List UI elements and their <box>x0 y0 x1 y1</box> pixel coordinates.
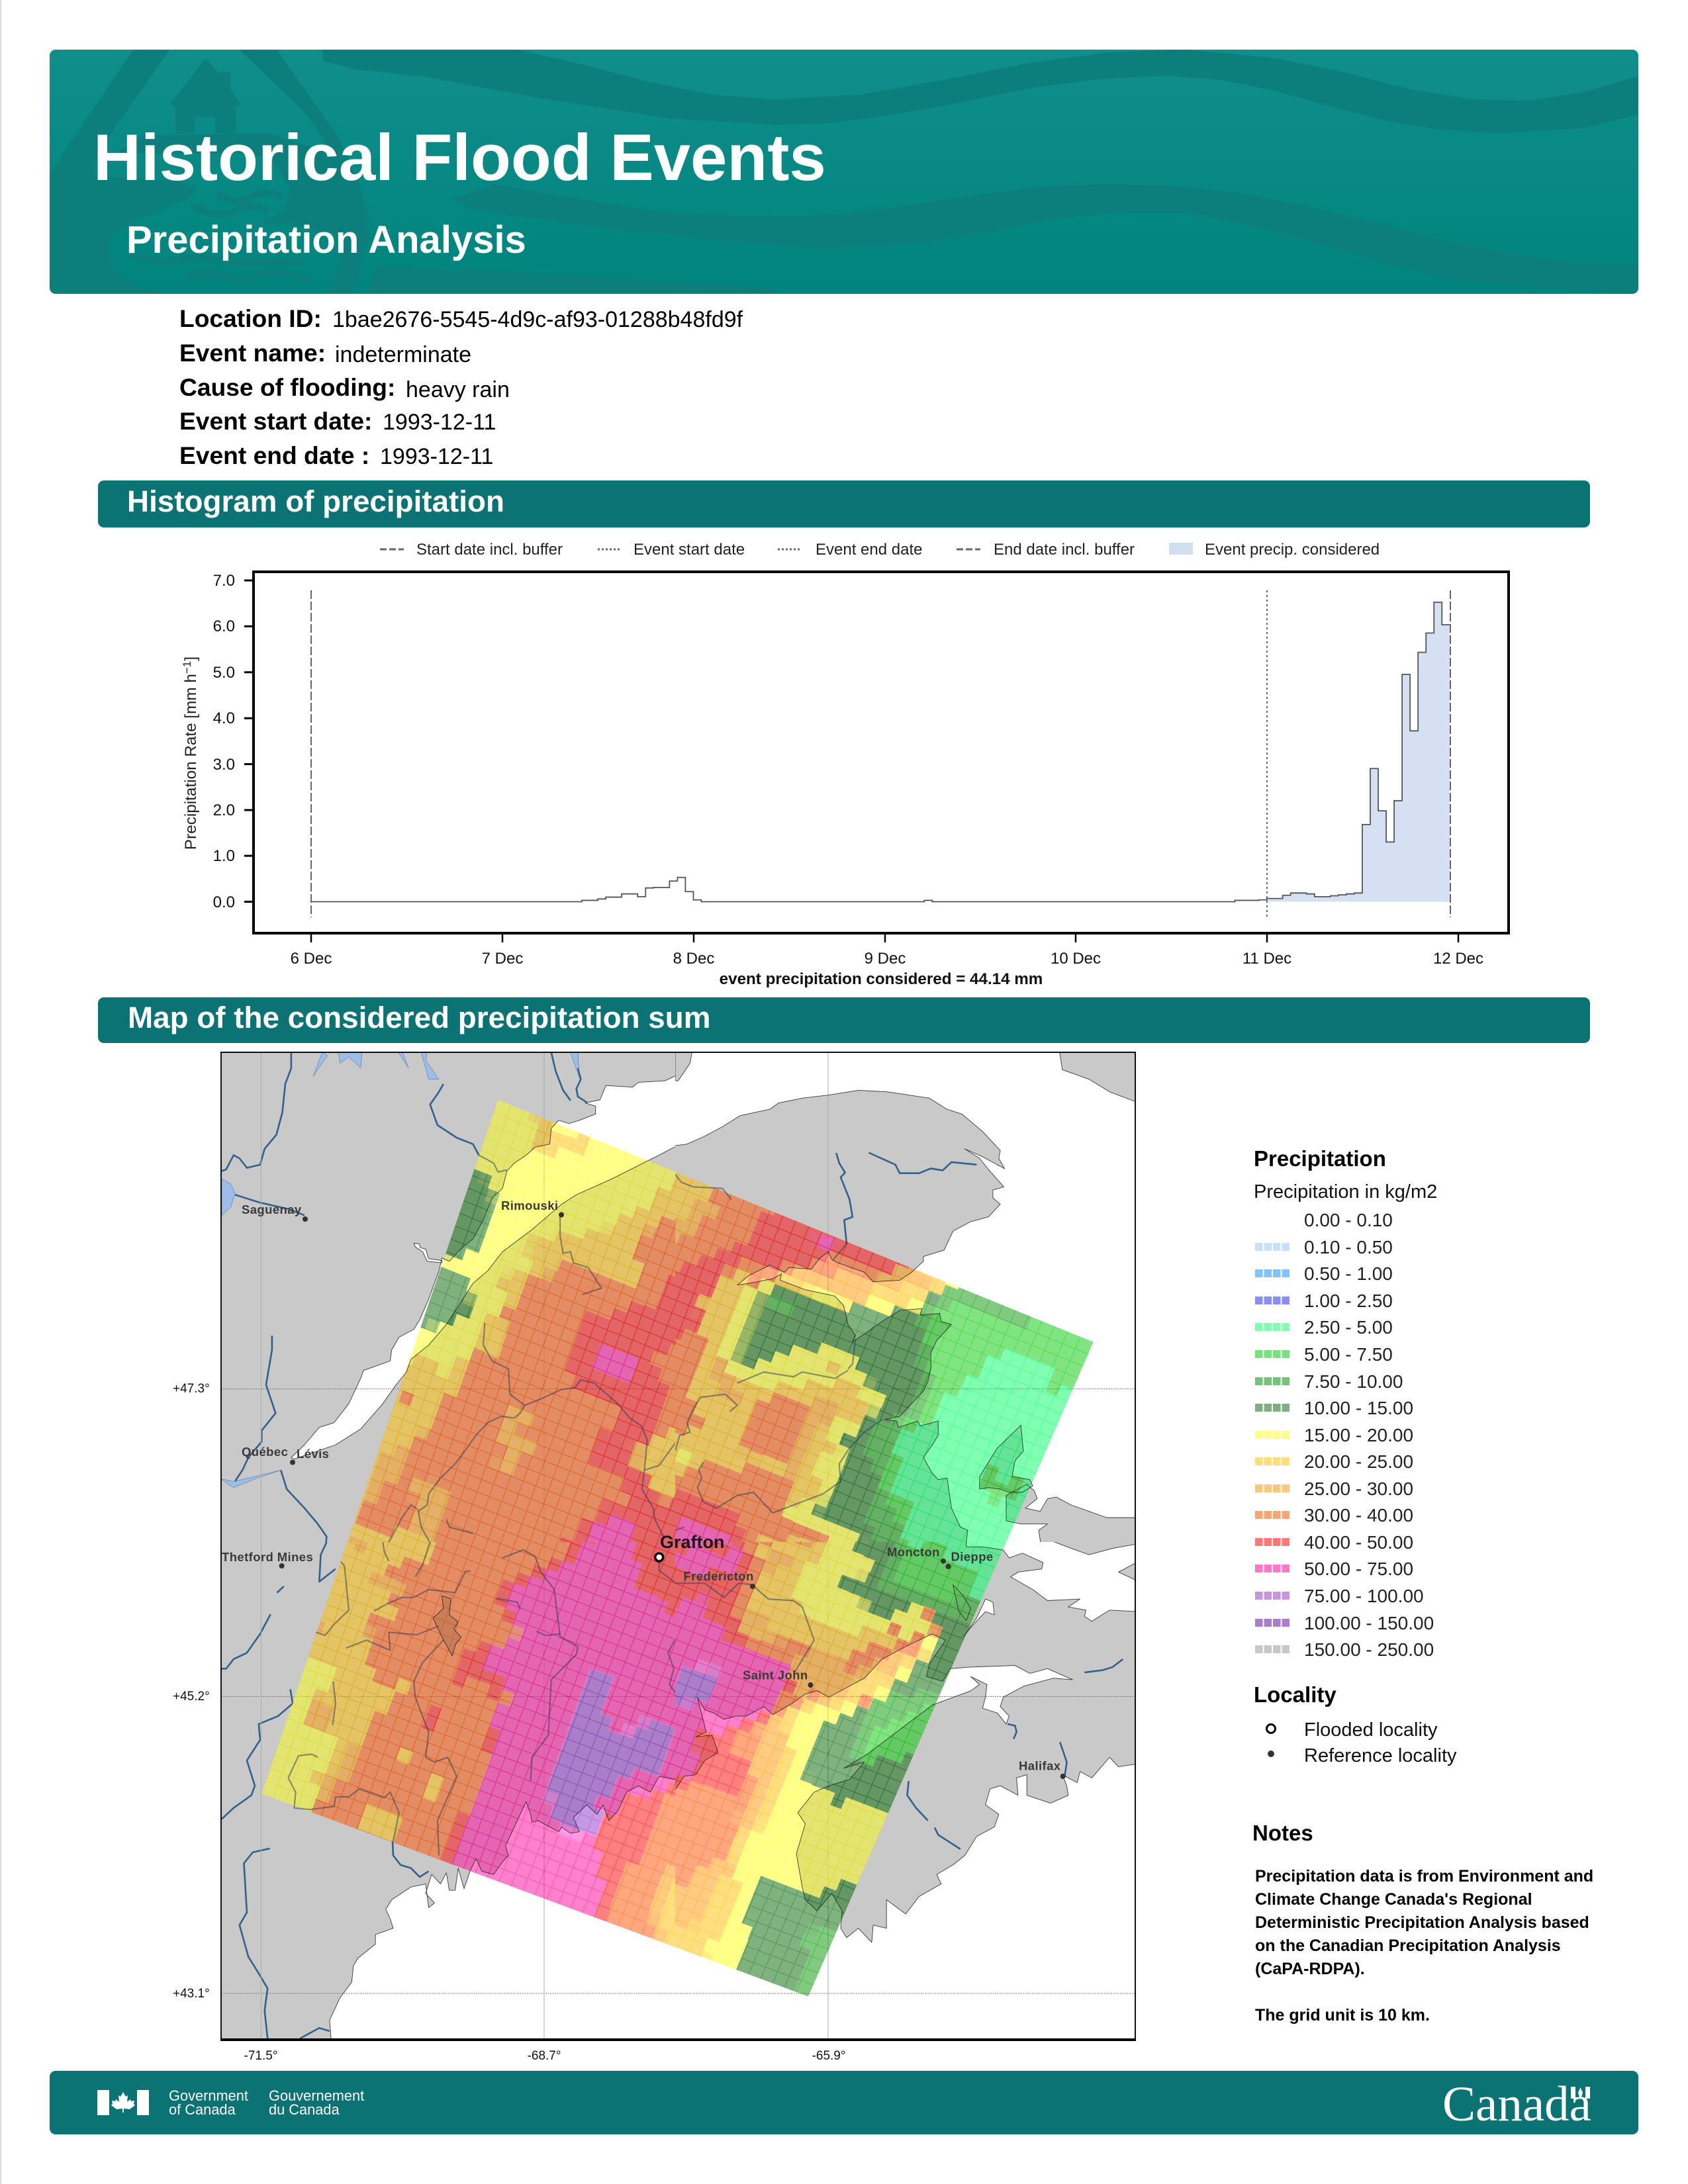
histogram chart: 10 Dec <box>1051 950 1101 968</box>
chart legend: Start date incl. buffer <box>416 541 563 559</box>
flooded locality: Grafton <box>655 1532 724 1561</box>
map legend: locality: Reference locality <box>1304 1745 1457 1766</box>
notes: Notes <box>1252 1821 1313 1845</box>
map legend: locality <box>1254 1682 1457 1766</box>
page edge line <box>0 0 1 2184</box>
reference localities: Québec <box>242 1445 288 1459</box>
map legend: precipitation: 20.00 - 25.00 <box>1304 1451 1413 1472</box>
reference localities: Lévis <box>297 1447 329 1461</box>
histogram chart: 8 Dec <box>673 950 714 968</box>
map legend: precipitation: 75.00 - 100.00 <box>1304 1586 1424 1606</box>
notes: Precipitation data is from Environment and <box>1255 1867 1593 1886</box>
map axis labels: +45.2° <box>173 1690 210 1704</box>
title: Historical Flood Events <box>93 121 826 195</box>
map legend: precipitation: 15.00 - 20.00 <box>1304 1425 1413 1445</box>
raster south-east quadrant <box>321 891 1481 2176</box>
chart legend: Event end date <box>816 541 922 559</box>
event metadata: Event name: <box>179 339 326 367</box>
map legend: precipitation: Precipitation in kg/m2 <box>1254 1181 1437 1203</box>
histogram chart: 1.0 <box>213 847 235 865</box>
header banner <box>50 50 1638 294</box>
government wordmark <box>169 2087 364 2118</box>
map legend: locality: Flooded locality <box>1304 1719 1438 1741</box>
event metadata: Cause of flooding: <box>179 373 395 401</box>
histogram chart: −1 <box>181 661 193 674</box>
map legend: precipitation: 7.50 - 10.00 <box>1304 1371 1403 1392</box>
icon: flooded house watermark <box>50 50 369 294</box>
notes: on the Canadian Precipitation Analysis <box>1255 1936 1561 1955</box>
map frame <box>220 1052 1136 2040</box>
event metadata: heavy rain <box>406 377 510 402</box>
government wordmark: Government <box>169 2087 248 2104</box>
map legend: precipitation: 0.00 - 0.10 <box>1304 1210 1393 1230</box>
histogram chart: 7.0 <box>213 572 235 590</box>
event metadata: 1bae2676-5545-4d9c-af93-01288b48fd9f <box>332 307 743 332</box>
chart legend: Event start date <box>633 541 745 559</box>
notes: The grid unit is 10 km. <box>1255 2006 1430 2025</box>
notes: (CaPA-RDPA). <box>1255 1960 1365 1978</box>
event precipitation fill <box>1267 602 1450 901</box>
header wave bands <box>323 50 1638 293</box>
map legend: precipitation: 30.00 - 40.00 <box>1304 1505 1413 1525</box>
event metadata: Event end date : <box>179 441 369 469</box>
reference localities: Moncton <box>887 1545 940 1559</box>
precipitation raster <box>0 884 1481 2183</box>
section heading: map <box>98 997 1590 1043</box>
histogram chart: 2.0 <box>213 801 235 819</box>
notes: Climate Change Canada's Regional <box>1255 1890 1532 1909</box>
histogram chart: 5.0 <box>213 664 235 682</box>
government wordmark: Gouvernement <box>269 2087 364 2104</box>
chart legend: Event precip. considered <box>1205 541 1380 559</box>
map legend: precipitation: 5.00 - 7.50 <box>1304 1344 1393 1365</box>
map legend: precipitation: 2.50 - 5.00 <box>1304 1317 1393 1338</box>
raster cell grid <box>261 1100 1094 1997</box>
map base land and sea <box>221 1052 1135 2040</box>
event metadata: 1993-12-11 <box>380 444 493 469</box>
reference localities: Rimouski <box>501 1199 558 1212</box>
precipitation map <box>173 1052 1274 2060</box>
map legend: precipitation: 1.00 - 2.50 <box>1304 1291 1393 1311</box>
raster north-east quadrant <box>326 884 1476 2183</box>
event metadata <box>179 304 743 469</box>
map axis labels: +47.3° <box>173 1382 210 1396</box>
map axis labels <box>173 1382 845 2063</box>
map legend: precipitation: 50.00 - 75.00 <box>1304 1559 1413 1579</box>
raster north-west quadrant <box>0 887 988 2169</box>
map axis labels: -65.9° <box>812 2049 845 2063</box>
histogram chart <box>181 572 1509 988</box>
event metadata: Event start date: <box>179 407 372 435</box>
map legend: locality: Locality <box>1254 1682 1336 1707</box>
flooded locality: Grafton: Grafton <box>660 1532 724 1552</box>
chart legend <box>380 541 1380 559</box>
chart legend: End date incl. buffer <box>994 541 1135 559</box>
reference localities: Saguenay <box>242 1203 302 1216</box>
reference localities <box>222 1199 1066 1779</box>
histogram chart: ] <box>182 657 200 661</box>
map legend: precipitation: Precipitation <box>1254 1146 1386 1171</box>
section heading: histogram <box>98 480 1590 527</box>
map axis labels: +43.1° <box>173 1987 210 2001</box>
event metadata: indeterminate <box>335 342 471 367</box>
map graticule <box>221 1389 1135 1993</box>
footer bar <box>50 2071 1638 2134</box>
subtitle: Precipitation Analysis <box>126 218 526 261</box>
map legend: precipitation: 10.00 - 15.00 <box>1304 1398 1413 1418</box>
map legend: precipitation: 150.00 - 250.00 <box>1304 1639 1434 1660</box>
histogram chart: 12 Dec <box>1433 950 1483 968</box>
histogram chart: 0.0 <box>213 893 235 911</box>
map legend: precipitation: 0.10 - 0.50 <box>1304 1237 1393 1257</box>
reference localities: Halifax <box>1019 1759 1061 1772</box>
government wordmark: du Canada <box>269 2101 340 2118</box>
histogram chart: 4.0 <box>213 709 235 727</box>
event metadata: Location ID: <box>179 304 322 332</box>
coastlines and rivers <box>288 1051 1139 2039</box>
precipitation step line <box>311 602 1450 901</box>
notes: Deterministic Precipitation Analysis based <box>1255 1913 1589 1932</box>
section heading: histogram: Histogram of precipitation <box>127 484 504 518</box>
map legend: precipitation: 40.00 - 50.00 <box>1304 1532 1413 1553</box>
histogram chart: event precipitation considered = 44.14 mm <box>720 970 1043 988</box>
map legend: precipitation: 0.50 - 1.00 <box>1304 1263 1393 1284</box>
map legend: precipitation: 25.00 - 30.00 <box>1304 1479 1413 1499</box>
map legend: precipitation: 100.00 - 150.00 <box>1304 1613 1434 1633</box>
histogram chart: 6.0 <box>213 617 235 635</box>
map axis labels: -71.5° <box>244 2049 277 2063</box>
reference localities: Saint John <box>743 1668 808 1682</box>
section heading: map: Map of the considered precipitation sum <box>128 1001 710 1034</box>
histogram chart: 3.0 <box>213 756 235 774</box>
histogram chart: 11 Dec <box>1243 950 1291 968</box>
histogram chart: 9 Dec <box>865 950 906 968</box>
reference localities: Thetford Mines <box>222 1550 313 1564</box>
map legend: precipitation <box>1254 1146 1437 1660</box>
histogram chart: 7 Dec <box>482 950 523 968</box>
icon: Canadian flag <box>97 2090 149 2115</box>
government wordmark: of Canada <box>169 2101 236 2118</box>
map axis labels: -68.7° <box>528 2049 561 2063</box>
histogram chart: 6 Dec <box>291 950 332 968</box>
reference localities: Dieppe <box>951 1550 994 1564</box>
notes <box>1252 1821 1593 2025</box>
event metadata: 1993-12-11 <box>383 410 496 435</box>
raster south-west quadrant <box>0 893 996 2163</box>
histogram chart: Precipitation Rate [mm h <box>182 674 200 850</box>
reference localities: Fredericton <box>683 1569 754 1583</box>
Canada wordmark: Canada <box>1442 2077 1591 2132</box>
